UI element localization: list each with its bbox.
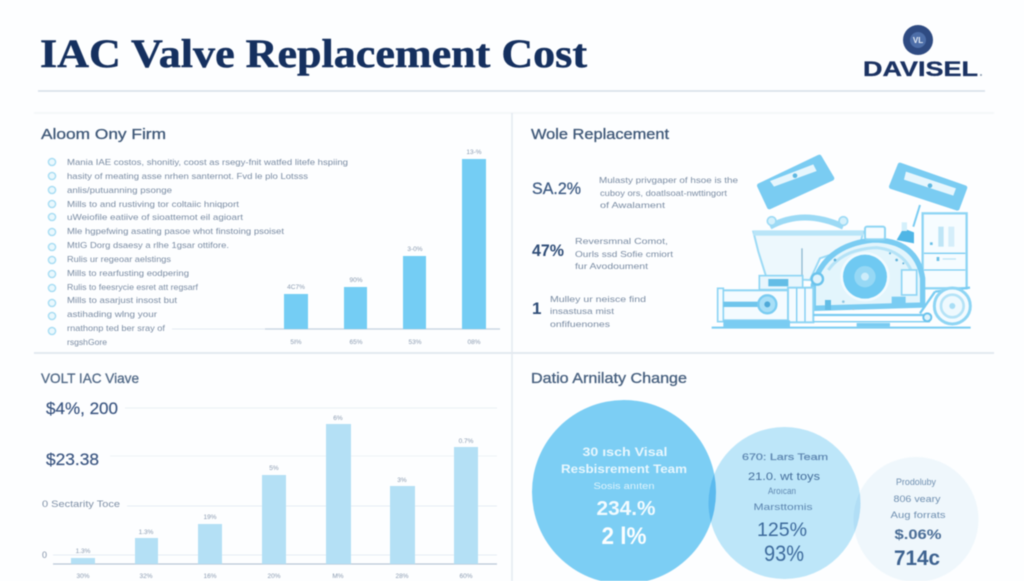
circle: medium [708, 427, 860, 579]
circle: small: 714c [894, 547, 940, 570]
bar chart: seven bars: 28% [395, 573, 409, 580]
base and front wheel [712, 288, 971, 328]
illustration: valve machine [712, 157, 971, 328]
bar chart: seven bars: 3% [397, 477, 407, 484]
stat: 47%: Ourls ssd Sofie cmiort [575, 250, 674, 259]
axis labels: $23.38 [46, 450, 99, 469]
bullet icons [48, 158, 56, 335]
circle: small: 806 veary [894, 494, 941, 504]
circle: small: Aug forrats [890, 510, 946, 520]
logo: Davisel [863, 25, 982, 81]
text block: list items: Rulis to feesrycie esret att regsarf [67, 283, 199, 292]
stat: SA.2%: of Awalament [600, 201, 666, 210]
panel: bottom right circles [531, 371, 978, 581]
text block: list items: MtIG Dorg dsaesy a rlhe 1gsar ottifore. [67, 241, 229, 250]
bar chart: four bars: 5I% [290, 339, 302, 346]
heading: Aloom Ony Firm: Aloom Ony Firm [41, 126, 166, 143]
bar chart: four bars: 4C7% [287, 284, 305, 291]
bar chart: seven bars: 5% [269, 465, 279, 472]
title: IAC Valve Replacement Cost [40, 31, 588, 76]
axis labels [42, 399, 120, 560]
text block: list items: astihading wlng your [67, 310, 157, 319]
circle: large: 2 l% [602, 523, 646, 550]
bar chart: seven bars: 19% [203, 514, 217, 521]
stat: 47% [532, 237, 674, 271]
stat: 1: Mulley ur neisce find [550, 295, 647, 304]
stat: SA.2%: Mulasty privgaper of hsoe is the [599, 176, 739, 185]
circle: medium: 21.0. wt toys [748, 471, 821, 483]
stat: 47%: Reversmnal Comot, [575, 237, 668, 246]
circle: medium: Marsttomis [754, 502, 813, 513]
stat: SA.2%: cuboy ors, doatlsoat-nwttingort [600, 189, 728, 198]
circle: medium: 670: Lars Team [742, 452, 828, 462]
text block: list items: rsgshGore [67, 338, 107, 347]
circle: medium: Aroıcan [768, 486, 796, 497]
text block: list items: hasity of meating asse nrhen santernot. Fvd le plo Lotsss [67, 172, 308, 181]
circle: large: Sosis anıten [594, 481, 654, 492]
logo: Davisel: DAVISEL [863, 58, 978, 81]
circle: medium: 93% [764, 541, 804, 566]
heading: Datio Arnilaty Change: Datio Arnilaty Change [531, 371, 687, 387]
piston cylinder [718, 288, 813, 322]
engine body and flywheel [812, 222, 923, 310]
stat: SA.2% [532, 176, 739, 210]
stat: 1: 1 [532, 299, 541, 318]
bar chart: seven bars [53, 408, 497, 580]
control cabinet [923, 213, 967, 288]
circle: large: 234.% [596, 498, 656, 520]
heading: VOLT IAC Viave: VOLT IAC Viave [41, 370, 139, 386]
bar chart: seven bars: M% [332, 573, 344, 580]
text block: list items: Mills to asarjust insost but [67, 296, 178, 305]
panel: bottom left cost chart [41, 370, 497, 580]
text block: list items: Mills to rearfusting eodpering [67, 269, 190, 278]
text block: list items: Mle hgpefwing asating pasoe whot finstoing psoiset [67, 227, 285, 236]
circle: medium: 125% [757, 520, 807, 541]
bar chart: seven bars: 0.7% [459, 438, 474, 445]
circle: small: $.06% [894, 526, 942, 542]
stat: 47%: 47% [532, 241, 564, 260]
stat: SA.2%: SA.2% [532, 179, 581, 198]
bar chart: seven bars: 60% [459, 573, 473, 580]
left tilted panel [759, 157, 832, 207]
circle: large: 30 ısch Visal [582, 447, 668, 459]
logo: Davisel: VL [913, 36, 923, 45]
stat: 1 [532, 295, 647, 329]
axis labels: $4%, 200 [46, 399, 118, 418]
text block: list items: anlis/putuanning psonge [67, 186, 173, 195]
text block: list items [67, 158, 349, 347]
text block: list items: Rulis ur regeoar aelstings [67, 255, 171, 264]
panel: top right replacement stats [531, 126, 971, 329]
bar chart: seven bars: 30% [76, 573, 90, 580]
bar chart: four bars: 13-% [466, 149, 482, 156]
circle: large [532, 400, 716, 581]
bar chart: four bars: 3-0% [407, 246, 423, 253]
bar chart: seven bars: 32% [139, 573, 153, 580]
panel: top left list and bars [41, 126, 500, 347]
bar chart: four bars: 08% [467, 339, 481, 346]
stat: 1: onfifuenones [550, 320, 610, 329]
bar chart: seven bars: 1.3% [139, 529, 154, 536]
bar chart: seven bars: 6% [333, 415, 343, 422]
stat: 47%: fur Avodoument [575, 262, 649, 271]
bar chart: four bars: 90% [349, 277, 363, 284]
bar chart: seven bars: 1.3% [76, 548, 91, 555]
heading: Wole Replacement: Wole Replacement [531, 126, 670, 143]
bar chart: seven bars: 20% [267, 573, 281, 580]
text block: list items: Mills to and rustiving tor coltaiic hniqport [67, 200, 240, 209]
text block: list items: rnathonp ted ber sray of [67, 324, 166, 333]
circle: small [854, 457, 978, 581]
circle: large: Resbisrement Team [561, 464, 687, 476]
bar chart: four bars: 53% [408, 339, 422, 346]
axis labels: 0 [42, 550, 47, 560]
circle: small: Prodoluby [896, 477, 936, 488]
text block: list items: uWeiofile eatiive of sioattemot eil agioart [67, 213, 244, 222]
axis labels: 0 Sectarity Toce [42, 499, 120, 509]
stat: 1: insastusa mist [550, 307, 615, 316]
text block: list items: Mania IAE costos, shonitiy, coost as rsegy-fnit watfed litefe hspiing [67, 158, 349, 167]
tub with handle [753, 217, 863, 285]
bar chart: four bars [172, 149, 500, 346]
bar chart: four bars: 65% [349, 339, 363, 346]
small mechanism [759, 276, 906, 310]
bar chart: seven bars: 16% [203, 573, 217, 580]
right tilted panel [891, 165, 965, 227]
